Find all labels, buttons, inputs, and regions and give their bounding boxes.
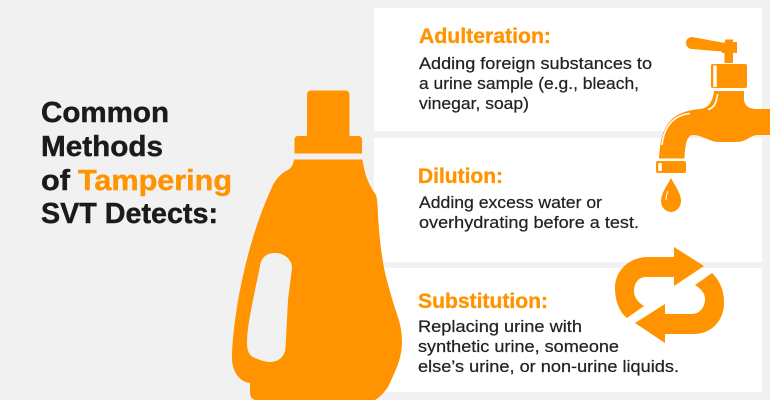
top arrow <box>615 247 704 318</box>
title: SVT Detects: <box>41 198 218 230</box>
faucet handle <box>686 37 737 63</box>
text: adulteration description: vinegar, soap) <box>419 94 529 113</box>
text: adulteration description: Adding foreign substances to <box>419 54 652 73</box>
text: adulteration description: a urine sample (e.g., bleach, <box>419 74 639 93</box>
text: substitution description: Replacing urine with <box>418 317 582 336</box>
faucet bonnet <box>711 64 747 88</box>
faucet nozzle <box>656 161 686 173</box>
text: substitution description: else’s urine, or non-urine liquids. <box>418 357 679 376</box>
text: adulteration description <box>419 54 652 113</box>
panel: dilution <box>374 138 762 262</box>
bottom arrow <box>635 273 724 343</box>
text: dilution description <box>419 193 639 232</box>
icon: substitution cycle arrows <box>615 247 724 343</box>
icon: detergent bottle <box>232 90 402 400</box>
icon: faucet <box>656 37 770 212</box>
title: of <box>41 165 70 197</box>
panel: substitution <box>374 268 762 392</box>
text: substitution description: synthetic urine, someone <box>418 337 619 356</box>
heading: dilution: Dilution: <box>418 165 503 188</box>
heading: adulteration: Adulteration: <box>419 25 551 48</box>
heading: substitution: Substitution: <box>418 290 548 313</box>
title: Common <box>41 97 169 129</box>
title <box>41 97 232 230</box>
water drop <box>661 178 681 212</box>
text: dilution description: Adding excess water or <box>419 193 602 212</box>
faucet highlights <box>660 66 718 200</box>
panel: adulteration <box>374 8 762 131</box>
text: dilution description: overhydrating before a test. <box>419 213 639 232</box>
text: substitution description <box>418 317 679 376</box>
faucet spout <box>659 91 770 158</box>
title: Tampering <box>78 165 232 197</box>
title: Methods <box>41 131 163 163</box>
